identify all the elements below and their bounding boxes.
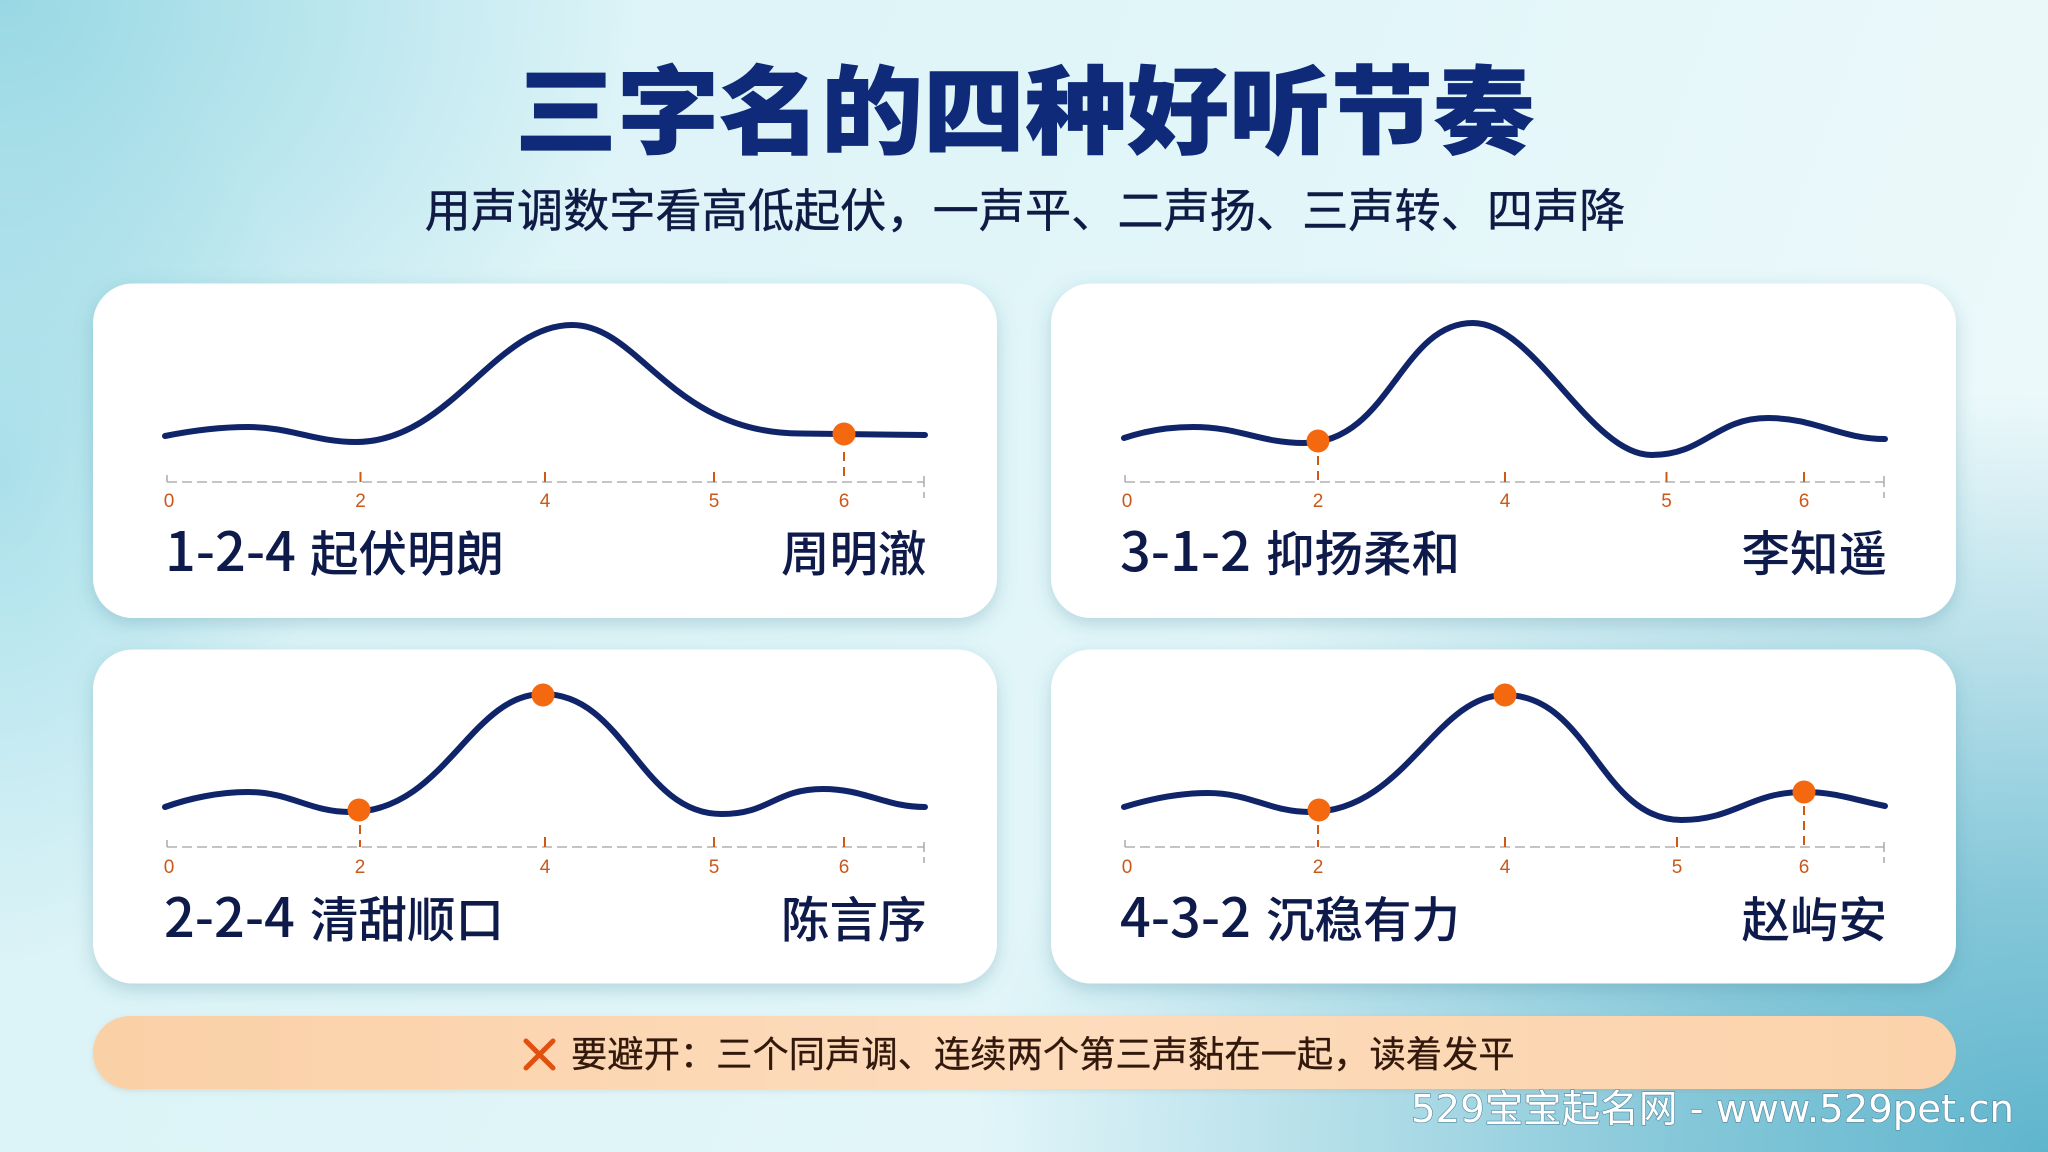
axis 4-3-2: 2	[1313, 857, 1323, 878]
pattern label: 抑扬柔和	[1266, 515, 1460, 585]
axis 4-3-2: 6	[1799, 857, 1809, 878]
axis 2-2-4	[164, 825, 924, 878]
axis 4-3-2: 0	[1122, 857, 1132, 878]
axis 2-2-4: 4	[540, 857, 551, 878]
axis 4-3-2: 5	[1672, 857, 1682, 878]
pattern label: 1-2-4	[165, 508, 296, 587]
axis 4-3-2	[1122, 806, 1884, 878]
warning text: 要避开：三个同声调、连续两个第三声黏在一起，读着发平	[571, 1034, 1515, 1075]
curve 3-1-2	[1124, 323, 1885, 455]
axis 3-1-2: 5	[1661, 491, 1672, 512]
example name: 陈言序	[781, 881, 926, 951]
example name: 周明澈	[781, 515, 926, 585]
highlight dots	[1308, 684, 1816, 822]
curve 4-3-2	[1124, 695, 1885, 820]
panel: 3-1-2	[1051, 284, 1956, 618]
axis 1-2-4: 6	[839, 491, 849, 512]
example name: 赵屿安	[1741, 881, 1887, 951]
axis 1-2-4: 0	[164, 491, 174, 512]
curve 2-2-4	[165, 694, 925, 814]
axis 3-1-2: 2	[1313, 491, 1323, 512]
title: 三字名的四种好听节奏	[515, 59, 1535, 166]
axis 1-2-4	[164, 452, 924, 512]
axis 2-2-4: 0	[164, 857, 174, 878]
axis 2-2-4: 6	[839, 857, 849, 878]
axis 2-2-4: 5	[709, 857, 719, 878]
highlight dot	[832, 422, 856, 446]
example name: 李知遥	[1741, 515, 1887, 585]
icon: cross	[526, 1041, 553, 1068]
pattern label: 起伏明朗	[310, 515, 504, 585]
highlight dots	[348, 684, 554, 822]
axis 3-1-2: 0	[1122, 491, 1132, 512]
axis 3-1-2: 4	[1500, 491, 1511, 512]
highlight dot	[1306, 430, 1330, 452]
pattern label: 2-2-4	[164, 874, 295, 953]
subtitle: 用声调数字看高低起伏，一声平、二声扬、三声转、四声降	[425, 185, 1625, 237]
watermark: 529宝宝起名网 - www.529pet.cn	[1411, 1087, 2014, 1131]
axis 3-1-2: 6	[1799, 491, 1809, 512]
axis 4-3-2: 4	[1500, 857, 1511, 878]
panel: 2-2-4	[93, 650, 997, 984]
panel: 4-3-2	[1051, 650, 1956, 984]
pattern label: 3-1-2	[1120, 508, 1251, 587]
pattern label: 4-3-2	[1120, 874, 1251, 953]
axis 1-2-4: 5	[709, 491, 719, 512]
panel: 1-2-4	[93, 284, 997, 618]
pattern label: 沉稳有力	[1266, 881, 1460, 951]
axis 1-2-4: 2	[355, 491, 366, 512]
axis 1-2-4: 4	[540, 491, 551, 512]
axis 3-1-2	[1122, 456, 1884, 512]
pattern label: 清甜顺口	[310, 881, 504, 951]
warning banner	[93, 1016, 1956, 1089]
curve 1-2-4	[165, 325, 925, 442]
axis 2-2-4: 2	[355, 857, 365, 878]
